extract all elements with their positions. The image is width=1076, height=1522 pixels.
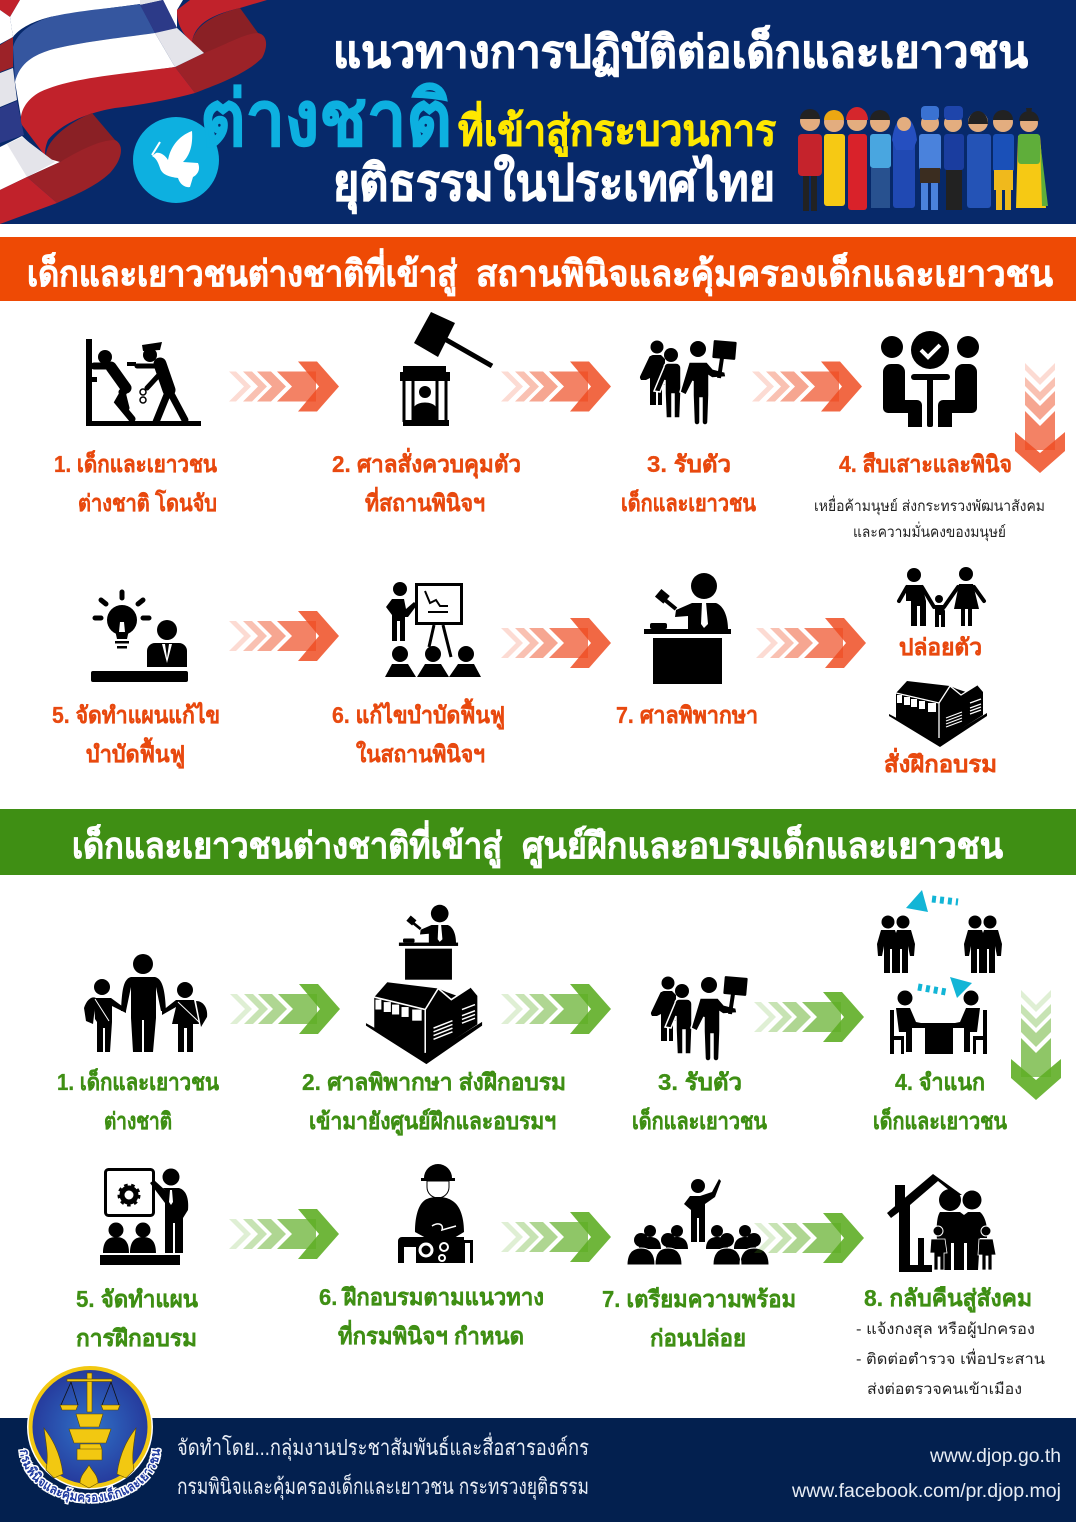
icon: dove in circle xyxy=(133,117,219,203)
title line 2: ที่เข้าสู่กระบวนการ xyxy=(458,101,776,157)
green step 4 label xyxy=(873,1069,1007,1134)
step 6 label xyxy=(332,698,505,767)
header banner xyxy=(0,0,1076,224)
footer organiser text: จัดทำโดย...กลุ่มงานประชาสัมพันธ์และสื่อสารองค์กร xyxy=(177,1432,589,1461)
arrow xyxy=(501,1212,611,1262)
step 7: court verdict xyxy=(616,573,758,728)
green step 1 label: 1. เด็กและเยาวชน xyxy=(57,1067,219,1095)
bar heading right: ศูนย์ฝึกและอบรมเด็กและเยาวชน xyxy=(522,823,1003,869)
release label: ปล่อยตัว xyxy=(899,634,982,660)
arrow down xyxy=(1015,363,1065,473)
green step 1 label xyxy=(57,1067,219,1134)
icon: gavel and cage xyxy=(400,312,492,426)
green step 5 xyxy=(76,1168,198,1351)
step 1 label: 1. เด็กและเยาวชน xyxy=(54,449,217,477)
icon: group with sign xyxy=(640,340,737,425)
arrow xyxy=(229,611,339,661)
green step 8 notes: ส่งต่อตรวจคนเข้าเมือง xyxy=(867,1381,1022,1398)
icon: training centre building xyxy=(889,681,987,747)
green step 7 xyxy=(602,1179,796,1351)
footer organiser text: กรมพินิจและคุ้มครองเด็กและเยาวชน กระทรวงยุติธรรม xyxy=(177,1472,589,1500)
green step 5 label: การฝึกอบรม xyxy=(76,1325,197,1351)
step 2 label xyxy=(332,447,521,516)
green step 6 label: 6. ฝึกอบรมตามแนวทาง xyxy=(319,1284,544,1310)
icon: two people at table with check xyxy=(881,331,979,427)
green step 7 label: ก่อนปล่อย xyxy=(650,1325,746,1351)
green step 3 xyxy=(632,976,767,1134)
green step 6 label: ที่กรมพินิจฯ กำหนด xyxy=(338,1319,524,1349)
footer links: www.djop.go.th xyxy=(929,1446,1061,1467)
logo: department seal xyxy=(18,1366,162,1505)
green step 2 label: 2. ศาลพิพากษา ส่งฝึกอบรม xyxy=(302,1069,566,1095)
green step 7 label: 7. เตรียมความพร้อม xyxy=(602,1286,796,1312)
green step 3 label: เด็กและเยาวชน xyxy=(632,1106,767,1134)
illustration: people in national costumes xyxy=(798,106,1048,211)
icon: police arrest xyxy=(86,339,201,426)
green step 5 label: 5. จัดทำแผน xyxy=(76,1286,198,1312)
arrow xyxy=(229,1209,339,1259)
step 2: court detention xyxy=(332,312,521,516)
step 4 note: เหยื่อค้ามนุษย์ ส่งกระทรวงพัฒนาสังคม xyxy=(814,495,1045,516)
arrow xyxy=(756,618,866,668)
logo: department seal: กรมพินิจและคุ้มครองเด็กและเยาวชน xyxy=(18,1448,162,1505)
green step 8 notes: - แจ้งกงสุล หรือผู้ปกครอง xyxy=(856,1321,1035,1339)
step 4: investigate xyxy=(814,331,1045,542)
green step 3 label: 3. รับตัว xyxy=(658,1069,742,1095)
green step 2 label xyxy=(302,1069,566,1136)
step 5: rehabilitation plan xyxy=(52,592,220,769)
icon: judge and building xyxy=(366,905,482,1064)
icon: judge at bench xyxy=(644,573,731,684)
green step 8 xyxy=(856,1174,1045,1398)
green step 5 label xyxy=(76,1286,198,1351)
step 6 label: 6. แก้ไขบำบัดฟื้นฟู xyxy=(332,698,505,730)
footer links xyxy=(791,1446,1061,1502)
green step 1 xyxy=(57,954,219,1134)
step 4 note xyxy=(814,495,1045,542)
arrow xyxy=(229,362,339,412)
bar heading right: สถานพินิจและคุ้มครองเด็กและเยาวชน xyxy=(476,251,1053,297)
step 5 label xyxy=(52,701,220,769)
green step 4 xyxy=(873,890,1007,1134)
step 3: receive xyxy=(621,340,756,516)
outcome: training order xyxy=(884,681,997,777)
arrow down xyxy=(1011,990,1061,1100)
step 2 label: ที่สถานพินิจฯ xyxy=(365,486,485,516)
arrow xyxy=(501,362,611,412)
icon: family returning home xyxy=(887,1174,996,1272)
arrow xyxy=(230,984,340,1034)
icon: light bulb and person at desk xyxy=(91,592,188,682)
green step 6 xyxy=(319,1164,544,1349)
footer xyxy=(0,1418,1076,1522)
step 4 note: และความมั่นคงของมนุษย์ xyxy=(853,521,1006,542)
bar heading left: เด็กและเยาวชนต่างชาติที่เข้าสู่ xyxy=(72,820,502,869)
green step 3 label xyxy=(632,1069,767,1134)
icon: classification interview xyxy=(877,890,1002,1054)
step 1 label xyxy=(54,449,217,516)
footer organiser text xyxy=(177,1432,589,1500)
section bar: juvenile observation and protection xyxy=(0,237,1076,301)
step 6 label: ในสถานพินิจฯ xyxy=(356,740,485,767)
step 4 label: 4. สืบเสาะและพินิจ xyxy=(839,451,1012,477)
step 5 label: บำบัดฟื้นฟู xyxy=(86,737,185,769)
section bar: training centres xyxy=(0,809,1076,875)
icon: presenter and audience xyxy=(385,582,481,677)
green step 4 label: 4. จำแนก xyxy=(895,1069,985,1095)
title word: foreign: ต่างชาติ xyxy=(200,77,452,162)
arrow xyxy=(501,984,611,1034)
green step 2 xyxy=(302,905,566,1136)
green step 2 label: เข้ามายังศูนย์ฝึกและอบรมฯ xyxy=(309,1108,556,1136)
icon: adult with two children xyxy=(84,954,207,1052)
icon: worker at machine xyxy=(398,1164,473,1263)
arrow xyxy=(752,362,862,412)
green step 8 label: 8. กลับคืนสู่สังคม xyxy=(864,1285,1032,1313)
Thai flag ribbon xyxy=(0,0,267,224)
arrow xyxy=(754,992,864,1042)
icon: group with sign xyxy=(651,976,748,1061)
green step 8 notes xyxy=(856,1321,1045,1398)
step 3 label xyxy=(621,451,756,516)
footer links: www.facebook.com/pr.djop.moj xyxy=(791,1481,1061,1502)
green step 1 label: ต่างชาติ xyxy=(104,1108,172,1134)
step 2 label: 2. ศาลสั่งควบคุมตัว xyxy=(332,447,521,479)
step 1: arrested xyxy=(54,339,217,516)
green step 6 label xyxy=(319,1284,544,1349)
title line 1: แนวทางการปฏิบัติต่อเด็กและเยาวชน xyxy=(333,25,1028,77)
icon: trainer and board xyxy=(100,1168,188,1265)
bar heading left: เด็กและเยาวชนต่างชาติที่เข้าสู่ xyxy=(27,248,457,297)
step 7 label: 7. ศาลพิพากษา xyxy=(616,702,758,728)
green step 8 notes: - ติดต่อตำรวจ เพื่อประสาน xyxy=(856,1348,1045,1368)
arrow xyxy=(754,1213,864,1263)
step 5 label: 5. จัดทำแผนแก้ไข xyxy=(52,701,220,728)
green step 4 label: เด็กและเยาวชน xyxy=(873,1106,1007,1134)
training label: สั่งฝึกอบรม xyxy=(884,747,997,777)
title line 3: ยุติธรรมในประเทศไทย xyxy=(333,154,775,214)
outcome: release xyxy=(899,567,984,660)
step 1 label: ต่างชาติ โดนจับ xyxy=(78,489,217,516)
arrow xyxy=(501,618,611,668)
icon: speaker and crowd xyxy=(627,1179,769,1265)
step 6: rehabilitate xyxy=(332,582,505,767)
step 3 label: เด็กและเยาวชน xyxy=(621,488,756,516)
step 3 label: 3. รับตัว xyxy=(647,451,731,477)
green step 7 label xyxy=(602,1286,796,1351)
icon: family xyxy=(899,567,984,627)
